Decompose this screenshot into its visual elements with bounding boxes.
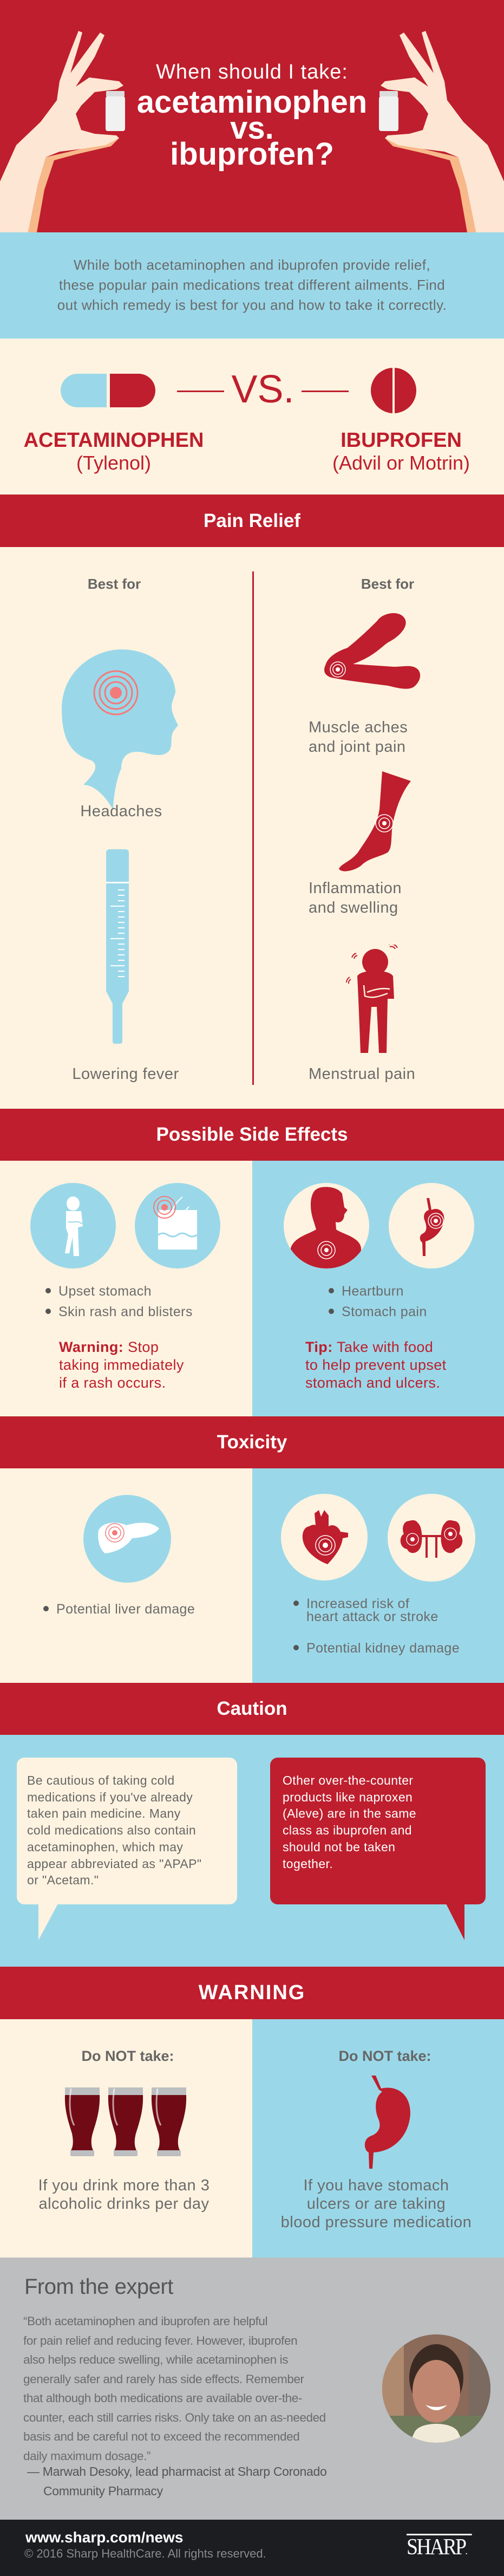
- list: toxicity: heart attack or stroke: [306, 1609, 438, 1624]
- title: [137, 61, 367, 172]
- icon: capsule: [61, 374, 155, 407]
- callout: cold medications: or "Acetam.": [27, 1873, 99, 1887]
- panel: side effects ibuprofen: [252, 1161, 504, 1416]
- intro text block: While both acetaminophen and ibuprofen provide relief,: [74, 257, 430, 273]
- panel: warning ibuprofen: If you have stomach: [303, 2177, 449, 2194]
- footer url: www.sharp.com/news: [25, 2529, 183, 2546]
- callout: naproxen: should not be taken: [283, 1840, 395, 1854]
- callout: warning: Warning: Stop: [59, 1339, 159, 1355]
- callout: cold medications: cold medications also contain: [27, 1823, 196, 1837]
- list: toxicity: [293, 1596, 460, 1656]
- heading: Pain Relief: [0, 495, 504, 547]
- icon: thermometer: [106, 849, 129, 1044]
- callout: cold medications: acetaminophen, which may: [27, 1840, 183, 1854]
- acetaminophen column: [62, 576, 179, 1083]
- panel: warning acetaminophen: Do NOT take:: [81, 2048, 174, 2064]
- callout: warning: taking immediately: [59, 1357, 184, 1373]
- icon: kidneys: [388, 1494, 475, 1582]
- heading: WARNING: WARNING: [199, 1981, 305, 2004]
- callout: naproxen: products like naproxen: [283, 1790, 413, 1804]
- list: side effects: [45, 1284, 193, 1319]
- ibuprofen column: Muscle aches: [309, 719, 408, 736]
- label: acetaminophen: [24, 429, 204, 474]
- logo: SHARP: SHARP.: [407, 2535, 466, 2560]
- heading: Caution: Caution: [217, 1698, 287, 1719]
- header panel: [0, 0, 504, 232]
- quote text: also helps reduce swelling, while acetaminophen is: [23, 2353, 288, 2366]
- icon: arm: [324, 613, 420, 689]
- icon: leg: [339, 771, 411, 871]
- list: toxicity: Increased risk of: [306, 1596, 409, 1611]
- callout: naproxen: together.: [283, 1857, 333, 1871]
- heading: WARNING: [0, 1967, 504, 2019]
- icon: stomach: [389, 1183, 474, 1269]
- quote text: generally safer and rarely has side effects. Remember: [23, 2372, 304, 2385]
- vs.: VS.: [231, 368, 294, 411]
- quote text: [23, 2314, 326, 2462]
- callout: cold medications: Be cautious of taking cold: [27, 1773, 175, 1787]
- panel: from the expert: [0, 2258, 504, 2520]
- callout: tip: [305, 1339, 447, 1391]
- label: acetaminophen: ACETAMINOPHEN: [24, 429, 204, 452]
- attribution: [27, 2464, 326, 2498]
- quote text: that although both medications are available over-the-: [23, 2391, 302, 2405]
- title: acetaminophen: [137, 84, 367, 120]
- list: side effects: Heartburn: [342, 1284, 404, 1299]
- illustration: left hand holding bottle: [0, 31, 125, 232]
- title: When should I take:: [156, 61, 348, 83]
- ibuprofen column: Inflammation: [309, 880, 402, 897]
- comparison header: acetaminophen vs ibuprofen: [24, 368, 470, 474]
- icon: stomach: [365, 2076, 410, 2169]
- list: side effects: Upset stomach: [58, 1284, 152, 1299]
- list: side effects: Skin rash and blisters: [58, 1304, 193, 1319]
- intro text block: these popular pain medications treat different ailments. Find: [59, 277, 445, 293]
- callout: naproxen: (Aleve) are in the same: [283, 1806, 416, 1820]
- callout: tip: stomach and ulcers.: [305, 1375, 440, 1391]
- title: vs.: [230, 110, 274, 146]
- heading: from the expert: From the expert: [24, 2275, 173, 2299]
- quote text: counter, each still carries risks. Only take on an as-needed: [23, 2410, 326, 2424]
- panel: warning acetaminophen: alcoholic drinks per day: [38, 2195, 210, 2213]
- panel: pain relief: [62, 571, 420, 1085]
- callout: warning: if a rash occurs.: [59, 1375, 166, 1391]
- icon: head with pain rings: [62, 649, 178, 810]
- heading: Possible Side Effects: [0, 1109, 504, 1161]
- heading: Pain Relief: Pain Relief: [204, 510, 300, 531]
- icon: heart: [281, 1494, 368, 1580]
- ibuprofen column: and swelling: [309, 899, 398, 916]
- attribution: — Marwah Desoky, lead pharmacist at Sharp Coronado: [27, 2464, 326, 2479]
- label: ibuprofen: IBUPROFEN: [341, 429, 462, 452]
- list: toxicity: Potential liver damage: [56, 1602, 195, 1617]
- intro text block: [0, 232, 504, 339]
- list: side effects: Stomach pain: [342, 1304, 427, 1319]
- callout: cold medications: [17, 1758, 237, 1940]
- icon: skin rash: [135, 1183, 220, 1269]
- acetaminophen column: Lowering fever: [72, 1065, 179, 1083]
- copyright: © 2016 Sharp HealthCare. All rights reserved.: [24, 2547, 266, 2560]
- attribution: Community Pharmacy: [43, 2484, 163, 2498]
- label: acetaminophen: (Tylenol): [76, 452, 151, 474]
- callout: cold medications: appear abbreviated as "APAP": [27, 1857, 201, 1871]
- acetaminophen column: Headaches: [80, 803, 162, 820]
- callout: naproxen: class as ibuprofen and: [283, 1823, 412, 1837]
- panel: warning acetaminophen: [0, 2019, 252, 2258]
- quote text: for pain relief and reducing fever. However, ibuprofen: [23, 2333, 297, 2347]
- ibuprofen column: Best for: [361, 576, 414, 592]
- panel: toxicity ibuprofen: [252, 1468, 504, 1683]
- icon: tablet: [371, 368, 416, 413]
- callout: cold medications: medications if you've already: [27, 1790, 193, 1804]
- quote text: daily maximum dosage.”: [23, 2449, 150, 2462]
- callout: naproxen: [270, 1758, 486, 1940]
- list: toxicity: Potential kidney damage: [306, 1641, 460, 1656]
- acetaminophen column: Best for: [88, 576, 141, 592]
- panel: toxicity acetaminophen: [0, 1468, 252, 1683]
- heading: Caution: [0, 1683, 504, 1735]
- quote text: “Both acetaminophen and ibuprofen are helpful: [23, 2314, 267, 2328]
- heading: Possible Side Effects: Possible Side Effects: [156, 1124, 348, 1145]
- heading: Toxicity: Toxicity: [217, 1432, 287, 1453]
- label: ibuprofen: (Advil or Motrin): [332, 452, 470, 474]
- divider: [252, 571, 254, 1085]
- heading: Toxicity: [0, 1416, 504, 1468]
- panel: warning ibuprofen: ulcers or are taking: [307, 2195, 446, 2213]
- icon: heartburn torso: [284, 1183, 369, 1269]
- panel: warning ibuprofen: [252, 2019, 504, 2258]
- title: ibuprofen?: [170, 136, 334, 172]
- callout: cold medications: taken pain medicine. Many: [27, 1806, 181, 1820]
- callout: naproxen: Other over-the-counter: [283, 1773, 413, 1787]
- icon: three glasses: [65, 2087, 186, 2156]
- photo: pharmacist portrait: [382, 2334, 490, 2443]
- panel: warning ibuprofen: blood pressure medication: [281, 2214, 472, 2231]
- callout: tip: to help prevent upset: [305, 1357, 447, 1373]
- label: ibuprofen: [332, 429, 470, 474]
- panel: warning acetaminophen: If you drink more than 3: [38, 2177, 210, 2194]
- ibuprofen column: and joint pain: [309, 738, 406, 756]
- footer: [0, 2520, 504, 2576]
- illustration: right hand holding bottle: [379, 31, 504, 232]
- quote text: basis and be careful not to exceed the recommended: [23, 2430, 299, 2443]
- icon: woman with cramps: [346, 945, 398, 1053]
- callout: warning: [59, 1339, 184, 1391]
- icon: person with upset stomach: [30, 1183, 116, 1269]
- icon: liver: [83, 1495, 171, 1583]
- callout: tip: Tip: Take with food: [305, 1339, 433, 1355]
- vs.: [177, 368, 349, 411]
- panel: warning ibuprofen: Do NOT take:: [338, 2048, 431, 2064]
- ibuprofen column: [309, 576, 420, 1083]
- intro text block: out which remedy is best for you and how to take it correctly.: [57, 297, 447, 313]
- ibuprofen column: Menstrual pain: [309, 1065, 415, 1083]
- panel: caution: [0, 1735, 504, 1967]
- list: side effects: [329, 1284, 427, 1319]
- panel: side effects acetaminophen: [0, 1161, 252, 1416]
